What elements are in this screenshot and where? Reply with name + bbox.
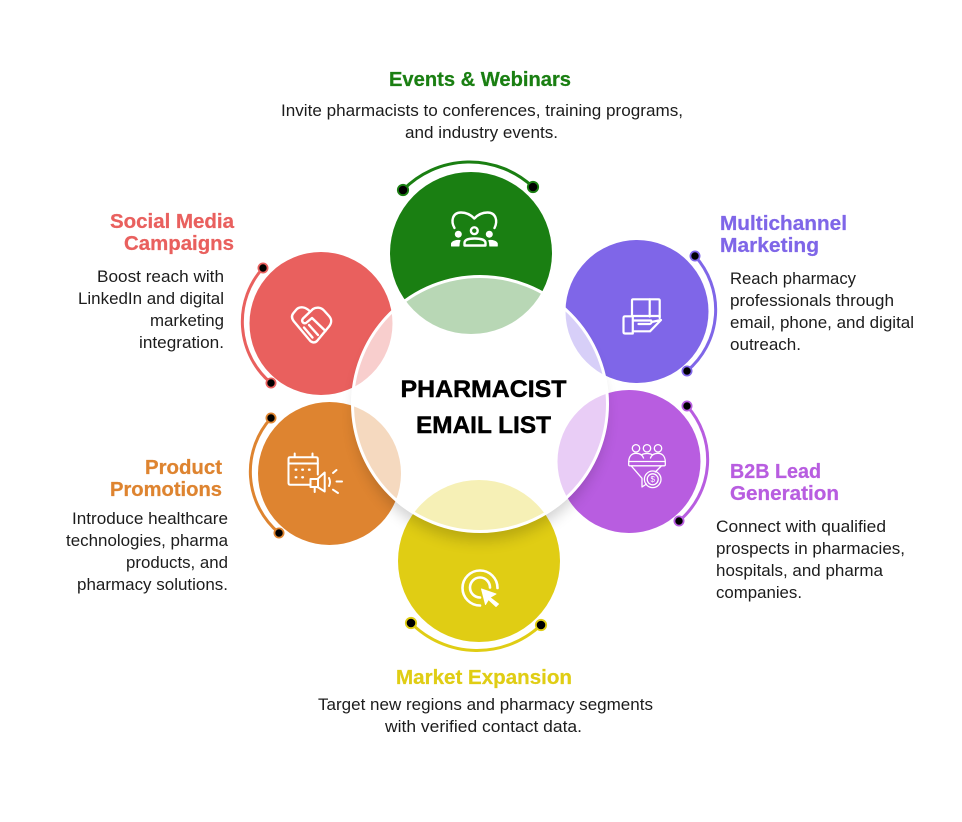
heading: product promotions: Product — [145, 456, 222, 479]
circle: market expansion — [398, 480, 560, 651]
text: b2b lead generation: prospects in pharmacies, — [716, 540, 905, 558]
text: social media campaigns — [78, 268, 224, 352]
text: multichannel marketing — [730, 270, 914, 354]
heading: product promotions — [110, 456, 222, 501]
text: product promotions: technologies, pharma — [66, 532, 229, 550]
text: multichannel marketing: email, phone, and digital — [730, 314, 914, 332]
circle: multichannel marketing — [566, 240, 716, 383]
heading: b2b lead generation: B2B Lead — [730, 460, 821, 483]
heading: b2b lead generation: Generation — [730, 482, 839, 505]
heading: product promotions: Promotions — [110, 478, 222, 501]
heading: social media campaigns — [110, 210, 235, 255]
circle: social media campaigns — [242, 252, 392, 395]
heading: multichannel marketing — [720, 212, 847, 257]
text: social media campaigns: LinkedIn and digital — [78, 290, 224, 308]
heading: events and webinars: Events & Webinars — [389, 68, 571, 91]
text: b2b lead generation: hospitals, and pharma — [716, 562, 884, 580]
heading: social media campaigns: Social Media — [110, 210, 235, 233]
circle: events and webinars — [390, 162, 552, 334]
text: multichannel marketing: outreach. — [730, 336, 801, 354]
text: social media campaigns: marketing — [150, 312, 224, 330]
text: product promotions: pharmacy solutions. — [77, 576, 228, 594]
icon: target with cursor — [462, 570, 498, 606]
text: social media campaigns: Boost reach with — [97, 268, 224, 286]
icon: funnel with people and coin — [629, 445, 665, 488]
text: events and webinars: and industry events. — [405, 124, 558, 142]
text: product promotions — [66, 510, 229, 594]
heading: b2b lead generation — [730, 460, 839, 505]
icon: people under heart — [452, 212, 497, 246]
text: b2b lead generation: Connect with qualified — [716, 518, 886, 536]
circle: product promotions — [250, 402, 401, 545]
circle: b2b lead generation — [558, 390, 708, 533]
central title — [400, 376, 567, 439]
heading: multichannel marketing: Multichannel — [720, 212, 847, 235]
central title: EMAIL LIST — [416, 412, 551, 439]
text: market expansion: Target new regions and pharmacy segments — [318, 696, 653, 714]
heading: social media campaigns: Campaigns — [124, 232, 234, 255]
icon label: dollar sign: $ — [650, 475, 655, 484]
icon: box on hand — [624, 299, 661, 334]
text: multichannel marketing: professionals through — [730, 292, 894, 310]
icon: handshake — [292, 307, 331, 342]
text: events and webinars: Invite pharmacists to conferences, training programs, — [281, 102, 683, 120]
text: multichannel marketing: Reach pharmacy — [730, 270, 857, 288]
text: product promotions: products, and — [126, 554, 228, 572]
central hub circle — [351, 275, 609, 533]
text: market expansion: with verified contact data. — [384, 718, 582, 736]
icon: calendar and megaphone — [288, 454, 342, 493]
text: product promotions: Introduce healthcare — [72, 510, 228, 528]
text: events and webinars — [281, 102, 683, 142]
heading: multichannel marketing: Marketing — [720, 234, 819, 257]
text: social media campaigns: integration. — [139, 334, 224, 352]
heading: market expansion: Market Expansion — [396, 666, 572, 689]
text: b2b lead generation — [716, 518, 905, 602]
central title: PHARMACIST — [400, 376, 567, 403]
text: b2b lead generation: companies. — [716, 584, 802, 602]
text: market expansion — [318, 696, 653, 736]
